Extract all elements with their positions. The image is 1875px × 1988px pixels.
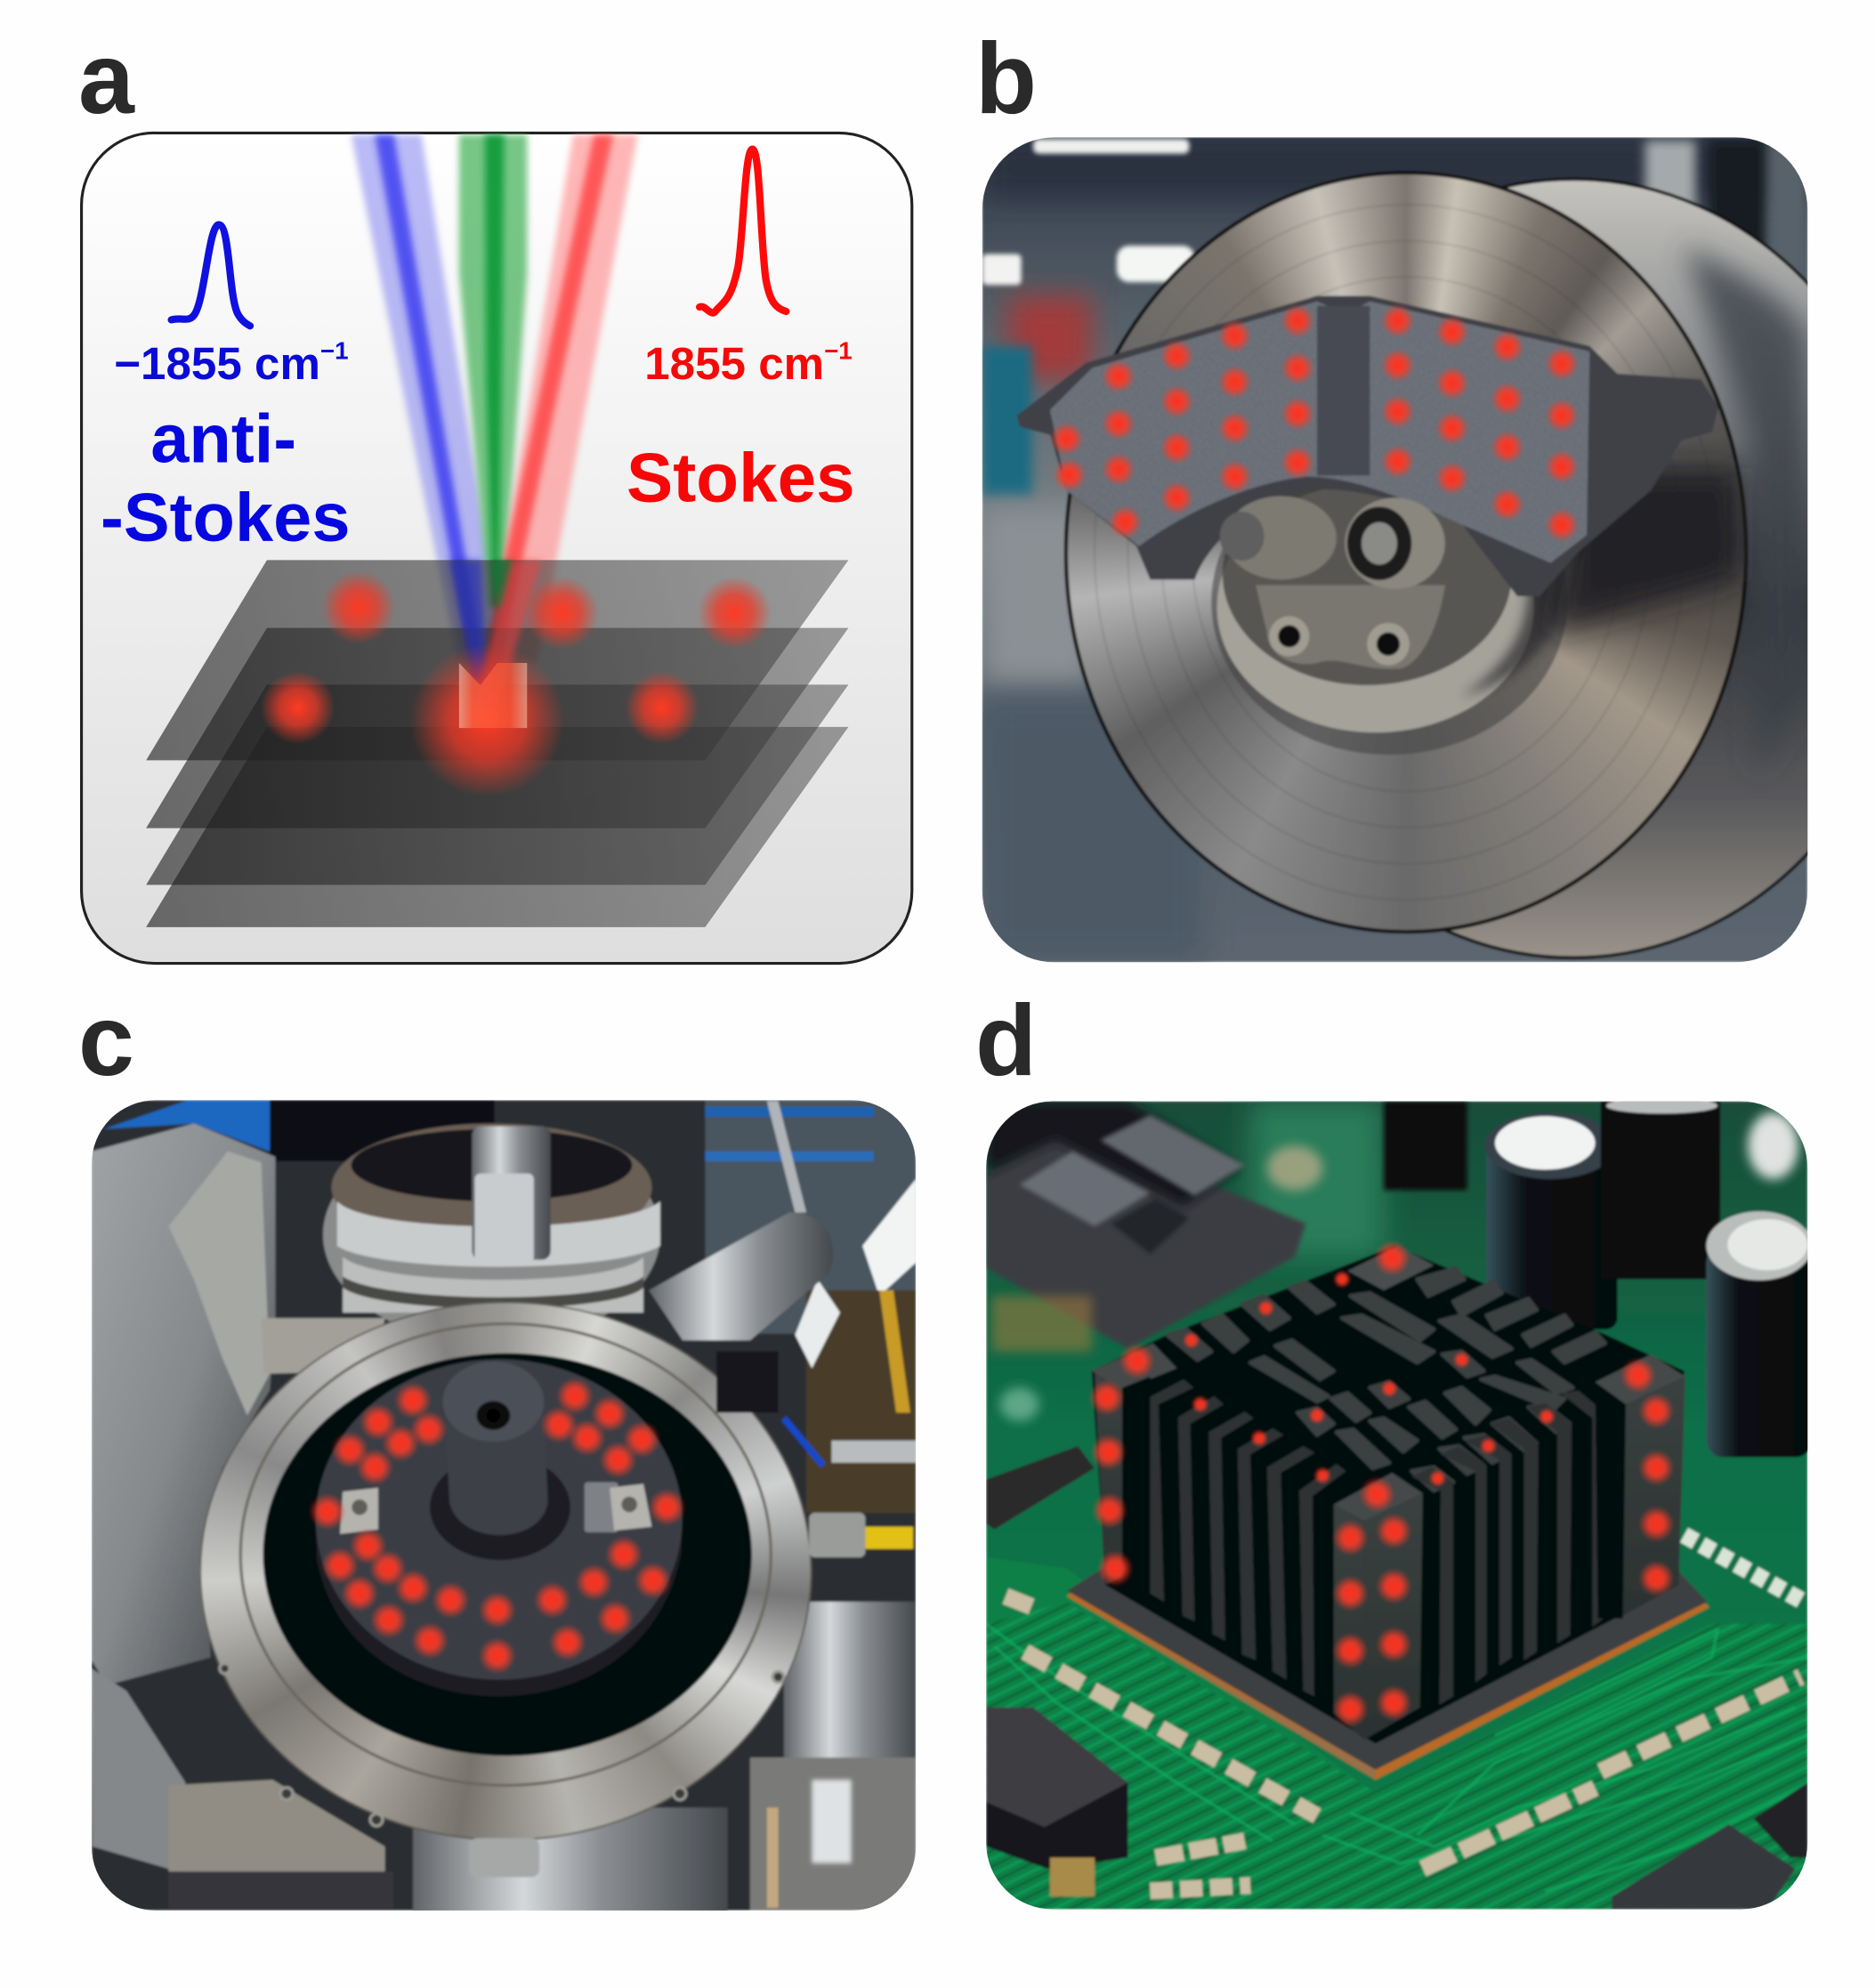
right row fins [1411, 1390, 1605, 1705]
Stokes wavenumber: 1855 cm [644, 338, 824, 389]
pad shadow [1550, 468, 1740, 635]
diagonal support bar [168, 1152, 270, 1416]
Stokes wavenumber: −1 [824, 337, 853, 365]
label b: b [975, 22, 1037, 134]
label a: a [78, 22, 135, 134]
red measurement dots on disc [309, 1378, 685, 1674]
inner ring groove [240, 1324, 771, 1785]
friction grain [1370, 457, 1425, 487]
heat sink base plate [1067, 1557, 1709, 1780]
label d: d [975, 984, 1037, 1096]
left corner post [1092, 1343, 1176, 1594]
back corner post [1347, 1246, 1434, 1290]
rear disc shading [1684, 246, 1807, 774]
right clamp [585, 1483, 651, 1532]
ring support bracket [262, 1318, 385, 1374]
black disc side [316, 1513, 682, 1696]
lower vessel [413, 1807, 728, 1913]
caliper mount [1256, 586, 1445, 669]
backing plate [1016, 295, 1718, 596]
capacitors [1485, 1098, 1812, 1458]
bottom clasp [469, 1838, 539, 1877]
left chip edge [986, 1446, 1095, 1530]
front corner post [1334, 1473, 1423, 1740]
left clamp [340, 1488, 378, 1534]
centre slot [1317, 306, 1370, 475]
blurred components behind [986, 1102, 1467, 1421]
machinery background [92, 1100, 916, 1911]
label c: c [78, 984, 134, 1096]
hub [1210, 489, 1568, 755]
anti-Stokes label: anti- [150, 401, 296, 477]
trace texture [986, 1602, 1807, 1910]
beams through planes [447, 555, 543, 688]
bottom left chip [986, 1708, 1128, 1896]
bright board lower area [986, 1557, 1807, 1910]
dark chamber opening [263, 1354, 752, 1756]
left row fins [1146, 1379, 1346, 1696]
red measurement dots on fins [1089, 1240, 1674, 1727]
rear brake disc [1443, 176, 1808, 961]
panel a: Raman scattering schematic [82, 133, 912, 963]
anti-Stokes wavenumber: −1855 cm [114, 338, 320, 389]
panel b: brake pad and disc photo [982, 137, 1875, 963]
light solder pads upper right [1684, 1535, 1804, 1602]
right corner post [1595, 1354, 1685, 1619]
fin tops field [1167, 1268, 1605, 1491]
left metal block [92, 1123, 275, 1685]
Stokes spectrum peak [699, 150, 786, 313]
anti-Stokes label: -Stokes [101, 480, 351, 556]
circuit traces [986, 1624, 1807, 1891]
excitation and scattered beams [352, 134, 638, 724]
ring bolts [220, 1663, 784, 1826]
guide pins [1220, 497, 1445, 589]
circuit board [986, 1102, 1807, 1910]
blurred garage background [982, 137, 1807, 963]
panel c: vacuum chamber photo [92, 1100, 916, 1913]
right cabling [716, 1352, 916, 1466]
sample disc top face [316, 1360, 683, 1680]
heat sink fin mass [1092, 1246, 1684, 1743]
red measurement dots on pad [1050, 304, 1579, 542]
flange ring [199, 1301, 812, 1841]
front brake disc [1064, 171, 1748, 933]
anti-Stokes wavenumber: −1 [320, 337, 349, 365]
surface mount parts [1006, 1596, 1801, 1891]
focus column [459, 663, 527, 728]
bottom right chips [1612, 1782, 1807, 1910]
friction material [1050, 302, 1589, 562]
anti-Stokes spectrum peak [172, 224, 250, 326]
side connector [809, 1513, 913, 1557]
centre collar [430, 1454, 570, 1560]
red luminescent spots [261, 570, 772, 797]
bottom-left bracket [92, 1669, 393, 1911]
rear vessel flanges [323, 1123, 660, 1343]
central column [443, 1362, 548, 1535]
panel d: heat sink on circuit board photo [986, 1098, 1812, 1910]
concentric disc grooves [1095, 205, 1717, 900]
elbow pipe [649, 1212, 833, 1340]
Stokes label: Stokes [626, 439, 855, 517]
stacked sample planes [146, 560, 848, 927]
